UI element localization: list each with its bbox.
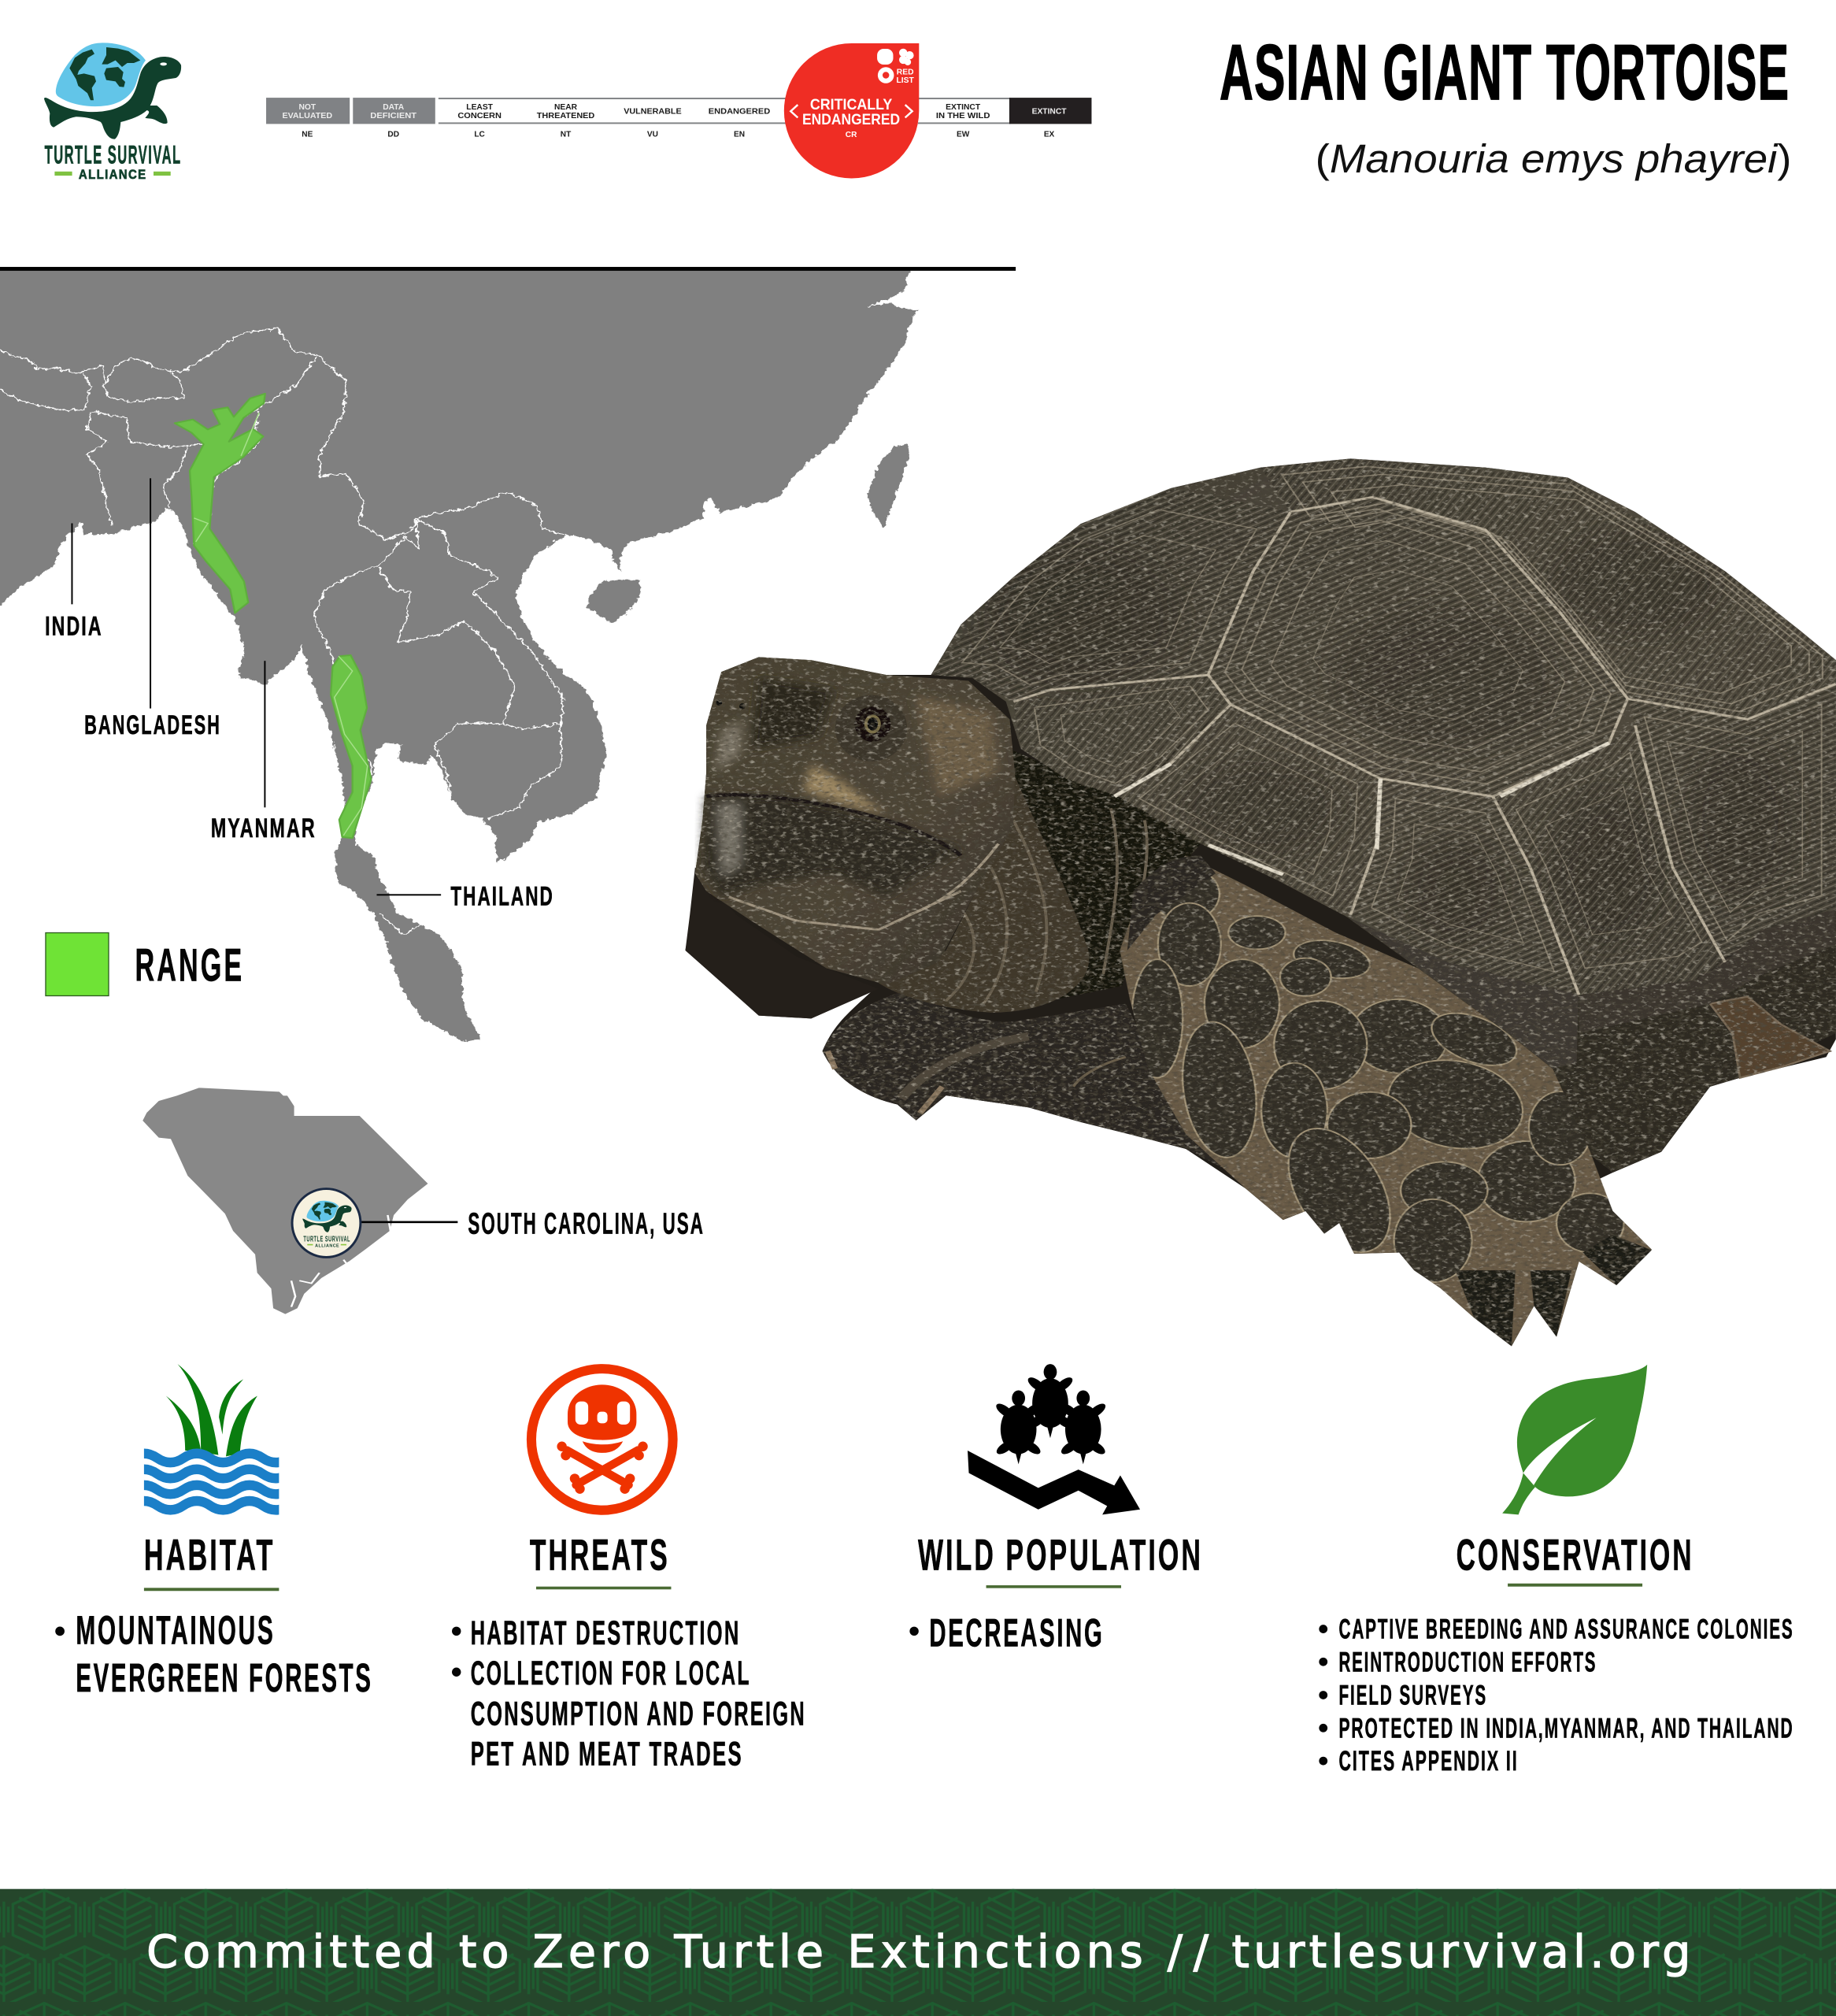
state outline — [143, 1088, 428, 1314]
category: near threatened: NEAR — [554, 103, 578, 112]
full body silhouette — [685, 458, 1836, 1346]
category: data deficient: DEFICIENT — [370, 112, 417, 120]
scute seams — [1013, 497, 1836, 995]
legend: range — [46, 932, 244, 995]
bright shell rim — [1115, 743, 1609, 875]
category: not evaluated: EVALUATED — [282, 112, 332, 120]
category: critically endangered badge: ENDANGERED — [802, 112, 900, 128]
category: least concern: LC — [474, 131, 486, 139]
tonal blotches — [983, 530, 1793, 944]
habitat text: EVERGREEN FORESTS — [76, 1655, 373, 1700]
category: near threatened: THREATENED — [537, 112, 594, 120]
scale outline bars — [439, 98, 1011, 124]
category: data deficient: DATA — [383, 103, 405, 112]
map callout: Bangladesh: BANGLADESH — [84, 710, 221, 740]
map callout: Myanmar: MYANMAR — [211, 813, 316, 843]
chin and throat — [685, 868, 879, 1018]
carapace shell — [931, 458, 1836, 1069]
icon: globe turtle — [44, 43, 181, 139]
heading: threats: THREATS — [530, 1530, 670, 1579]
logo sub-wordmark — [54, 168, 171, 182]
logo: Turtle Survival Alliance — [44, 43, 182, 182]
category: extinct: EXTINCT — [1032, 108, 1067, 117]
heading: wild population: WILD POPULATION — [918, 1530, 1203, 1579]
category: not evaluated — [266, 98, 350, 139]
footer slogan: // — [1168, 1926, 1209, 1978]
conservation list: CITES APPENDIX II — [1338, 1746, 1519, 1777]
icon: red list mark: RED — [897, 69, 914, 77]
icon: red list mark — [877, 49, 915, 85]
category: not evaluated: NE — [302, 131, 313, 139]
soft face tones — [702, 678, 998, 897]
icon: skull and crossbones — [531, 1369, 673, 1510]
population status — [909, 1611, 1104, 1655]
legend: range: RANGE — [135, 940, 244, 991]
category: least concern: CONCERN — [457, 112, 502, 120]
heading rule — [144, 1588, 279, 1591]
shell skirt underside — [1335, 909, 1579, 1069]
icon: turtles over falling arrow — [968, 1364, 1140, 1514]
footer slogan — [146, 1926, 1690, 1978]
threats list: HABITAT DESTRUCTION — [471, 1614, 741, 1651]
scute growth rings — [962, 466, 1823, 972]
category: endangered: EN — [734, 131, 745, 139]
map: South Carolina — [143, 1088, 705, 1314]
location badge: Turtle Survival Alliance: ALLIANCE — [315, 1243, 339, 1248]
category: data deficient: DD — [387, 131, 399, 139]
category: vulnerable — [624, 108, 682, 139]
location label: SOUTH CAROLINA, USA — [468, 1207, 705, 1241]
panel: conservation — [1319, 1365, 1794, 1777]
map callout: India: INDIA — [45, 612, 103, 642]
category: least concern: LEAST — [466, 103, 494, 112]
panel: habitat — [55, 1364, 373, 1700]
panel: threats — [452, 1369, 806, 1773]
heading rule — [536, 1587, 671, 1589]
category: vulnerable: VULNERABLE — [624, 108, 682, 117]
landmass and borders — [0, 254, 917, 1041]
category: extinct — [1009, 98, 1091, 139]
scientific name subtitle: (Manouria emys phayrei ) — [1316, 136, 1791, 181]
threats list: PET AND MEAT TRADES — [471, 1736, 743, 1773]
category: critically endangered badge: CR — [846, 131, 857, 139]
heading rule — [1508, 1584, 1642, 1587]
icon: red list mark: LIST — [897, 76, 915, 85]
locator line — [361, 1221, 457, 1223]
category: extinct in the wild: EXTINCT — [946, 103, 981, 112]
scaled front leg — [1120, 855, 1652, 1346]
logo wordmark: TURTLE SURVIVAL — [45, 140, 182, 169]
range area: Thailand and Myanmar border — [331, 655, 371, 838]
location badge: Turtle Survival Alliance: TURTLE SURVIVAL — [303, 1235, 350, 1243]
category: vulnerable: VU — [647, 131, 658, 139]
icon: leaf — [1502, 1365, 1647, 1514]
IUCN red list status scale — [266, 43, 1091, 178]
category: endangered: ENDANGERED — [709, 108, 770, 117]
category: endangered — [709, 108, 770, 139]
heading: habitat: HABITAT — [144, 1530, 275, 1579]
category: near threatened — [537, 103, 594, 139]
footer slogan: turtlesurvival.org — [1231, 1926, 1690, 1978]
conservation list: REINTRODUCTION EFFORTS — [1338, 1647, 1597, 1677]
population status: DECREASING — [929, 1611, 1104, 1655]
footer band — [0, 1889, 1836, 2016]
threats list: COLLECTION FOR LOCAL — [471, 1655, 751, 1692]
threats list — [452, 1614, 806, 1773]
footer slogan: Committed to Zero Turtle Extinctions — [146, 1926, 1143, 1978]
head — [695, 657, 1015, 984]
category: critically endangered badge — [784, 43, 919, 178]
map callout: Thailand: THAILAND — [450, 881, 554, 911]
range map of Asia — [0, 254, 1016, 1041]
category: near threatened: NT — [561, 131, 572, 139]
category: least concern — [457, 103, 502, 139]
category: critically endangered badge: CRITICALLY — [810, 97, 893, 113]
leg scales — [1132, 868, 1624, 1282]
turtle illustration — [685, 458, 1836, 1346]
logo sub-wordmark: ALLIANCE — [79, 168, 146, 182]
habitat text — [55, 1607, 373, 1700]
category: extinct in the wild: IN THE WILD — [936, 112, 990, 120]
panel: wild population — [909, 1364, 1203, 1655]
conservation list — [1319, 1614, 1794, 1777]
category: extinct in the wild: EW — [957, 131, 970, 139]
rear body and lower shell — [1553, 909, 1836, 1173]
icon: grass and water — [143, 1364, 279, 1515]
map top rule — [0, 267, 1016, 271]
location badge: Turtle Survival Alliance — [292, 1189, 361, 1257]
category: not evaluated: NOT — [298, 103, 316, 112]
threats list: CONSUMPTION AND FOREIGN — [471, 1695, 806, 1732]
habitat text: MOUNTAINOUS — [76, 1607, 275, 1652]
heading rule — [986, 1585, 1121, 1588]
category: data deficient — [353, 98, 435, 139]
left foreleg — [823, 992, 1260, 1188]
conservation list: FIELD SURVEYS — [1338, 1681, 1487, 1711]
category: extinct in the wild — [936, 103, 990, 139]
claws — [1456, 1235, 1652, 1346]
category: extinct: EX — [1044, 131, 1055, 139]
range area: northern Myanmar and northeast India — [175, 394, 265, 613]
eye — [835, 695, 907, 762]
neck — [879, 749, 1201, 1013]
